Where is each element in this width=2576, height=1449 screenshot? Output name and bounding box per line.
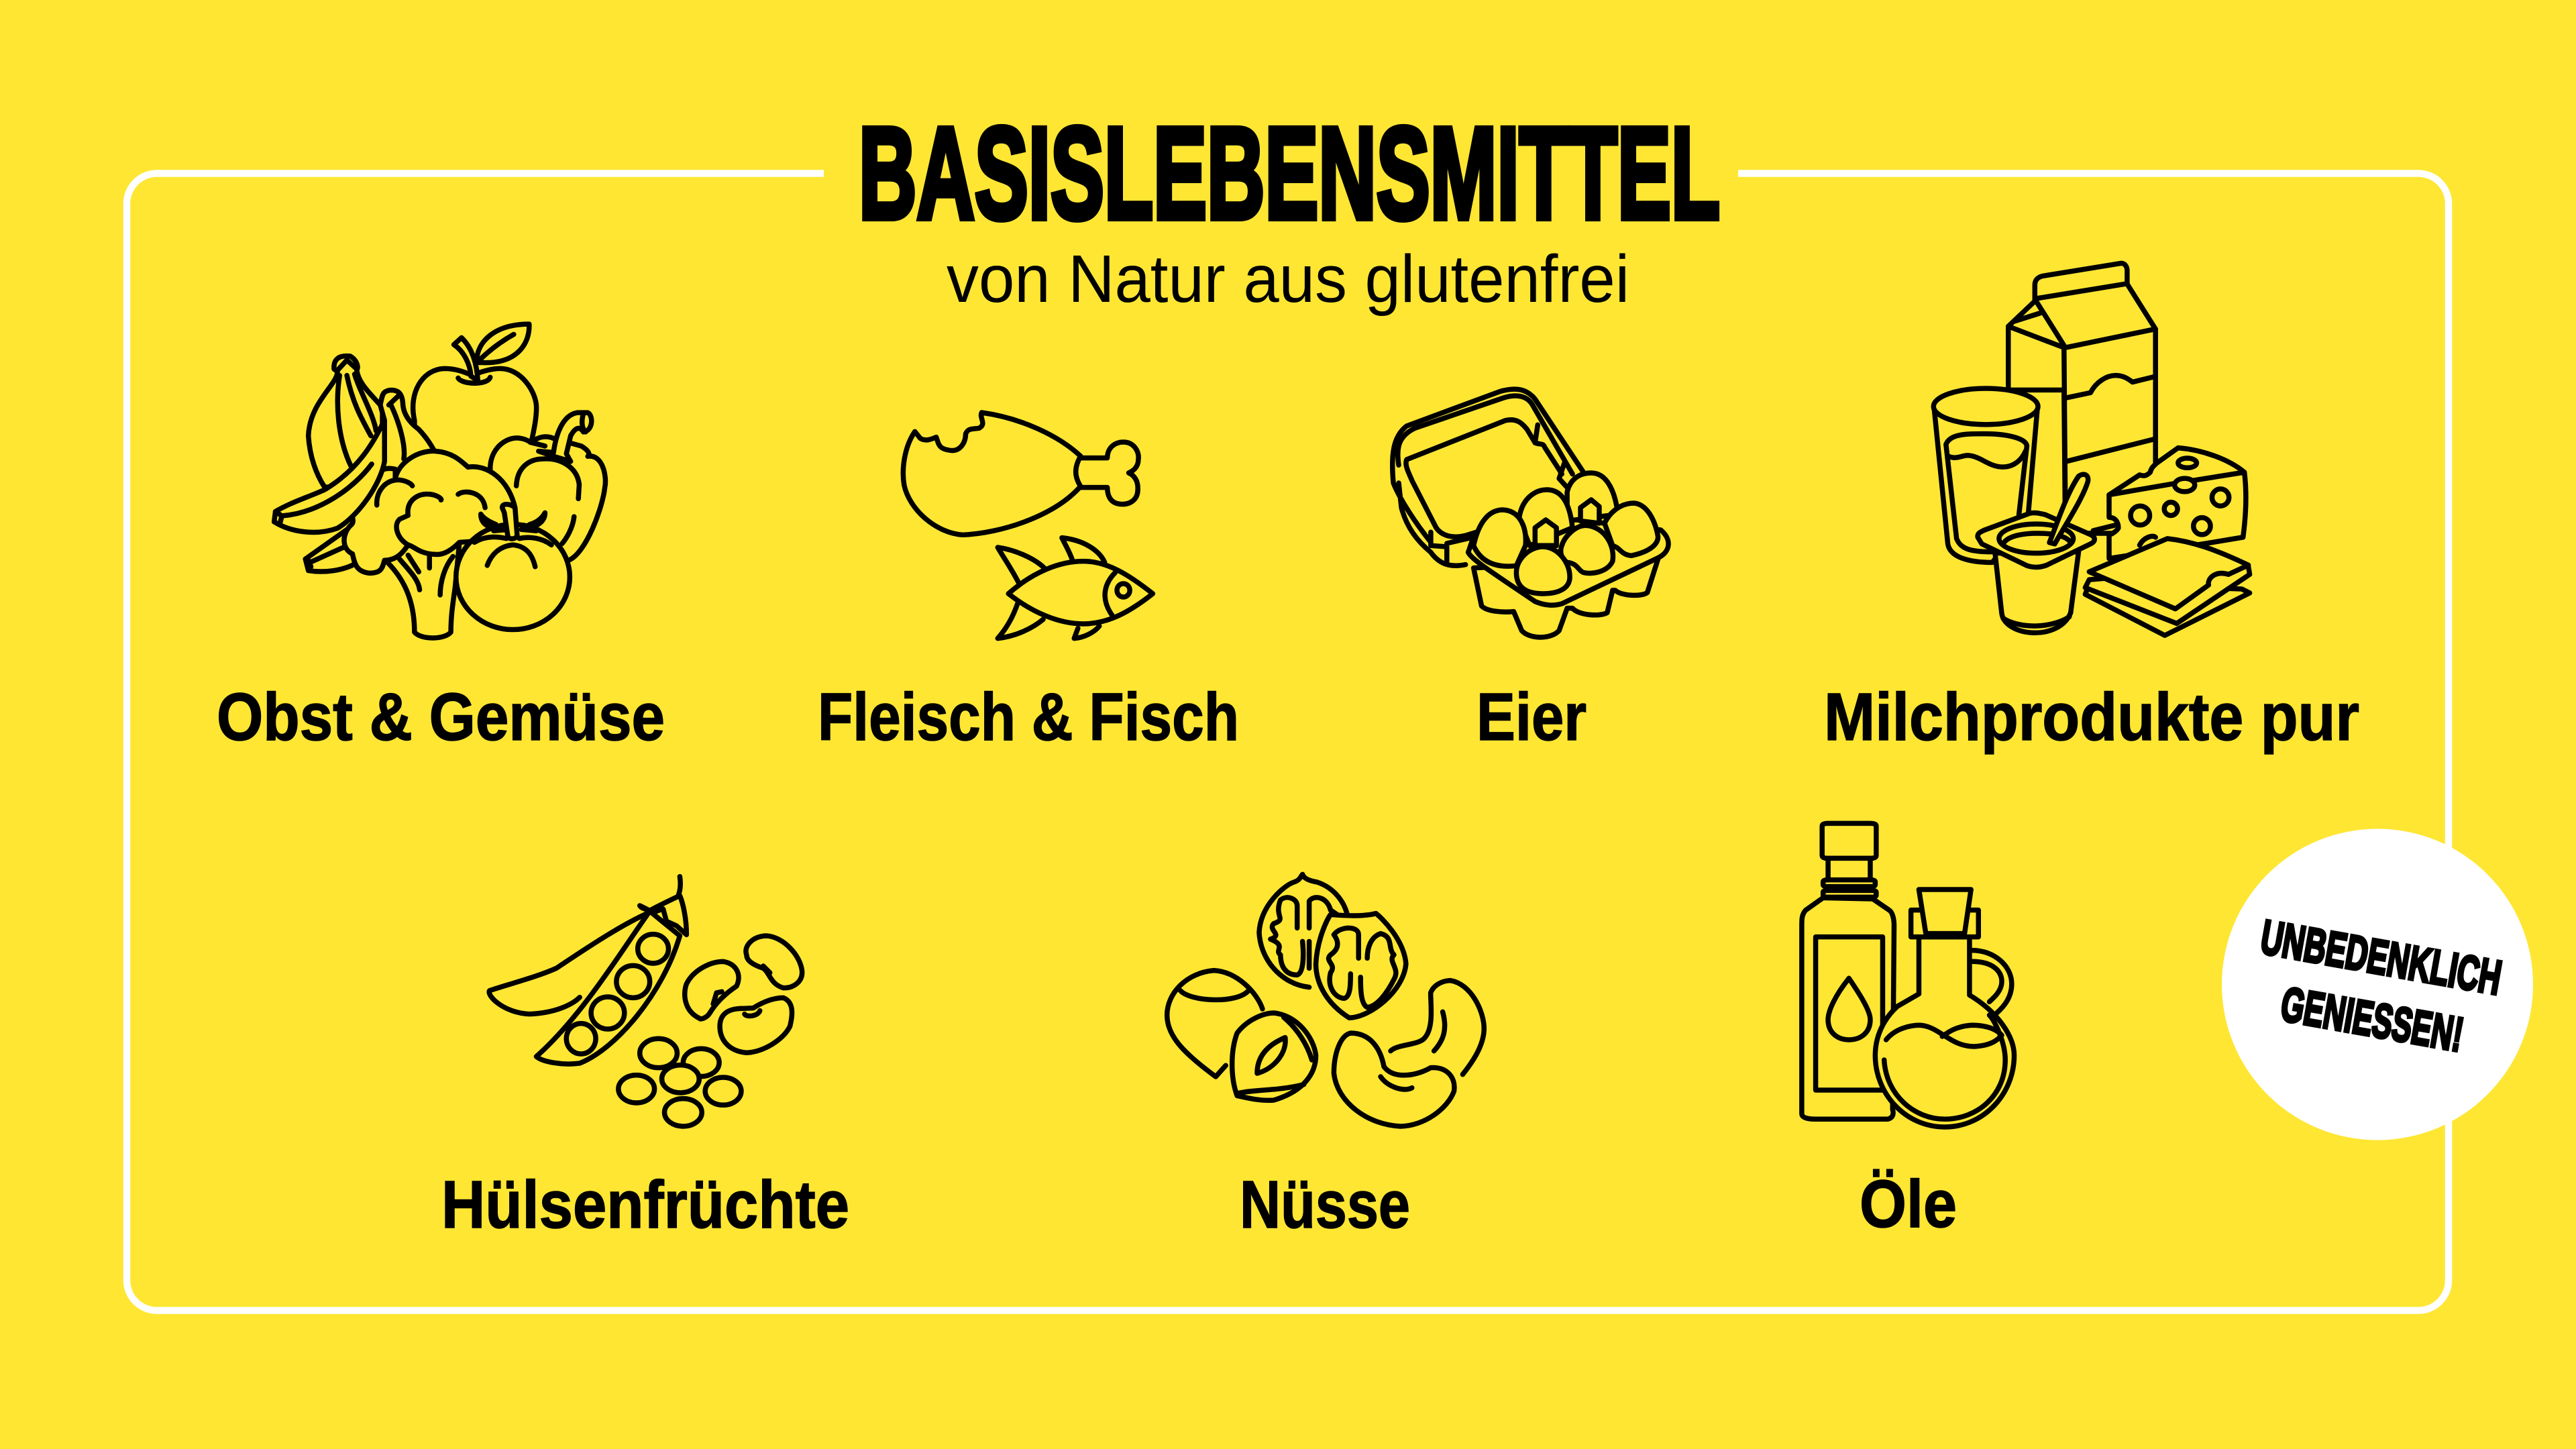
icon: milk, yogurt and cheese bbox=[1933, 263, 2250, 635]
icon: fruit and vegetables bbox=[274, 324, 605, 638]
panel: Milchprodukte pur bbox=[1824, 263, 2359, 755]
callout: badge bbox=[2222, 829, 2533, 1140]
title: BASISLEBENSMITTEL bbox=[859, 101, 1720, 247]
label: Nuesse: Nüsse bbox=[1240, 1167, 1410, 1242]
panel: Obst und Gemuese bbox=[217, 324, 665, 755]
panel: white rounded frame bbox=[127, 173, 2449, 1311]
icon: oil bottle and jug bbox=[1802, 823, 2015, 1127]
icon: egg carton bbox=[1393, 389, 1668, 637]
panel: Nuesse bbox=[1167, 874, 1484, 1242]
icon: pea pod and beans bbox=[489, 877, 802, 1126]
label: Fleisch und Fisch: Fleisch & Fisch bbox=[818, 680, 1239, 755]
subtitle: von Natur aus glutenfrei bbox=[947, 241, 1629, 317]
label: Milchprodukte pur: Milchprodukte pur bbox=[1824, 680, 2359, 755]
panel: Fleisch und Fisch bbox=[818, 413, 1239, 755]
icon: chicken leg and fish bbox=[903, 413, 1152, 639]
panel: Eier bbox=[1393, 389, 1668, 755]
panel: Huelsenfruechte bbox=[441, 877, 849, 1242]
badge circle bbox=[2222, 829, 2533, 1140]
label: Obst und Gemuese: Obst & Gemüse bbox=[217, 680, 665, 755]
badge text line 2: GENIESSEN! bbox=[2277, 977, 2467, 1062]
label: Oele: Öle bbox=[1860, 1167, 1957, 1242]
panel: Oele bbox=[1802, 823, 2015, 1242]
label: Eier: Eier bbox=[1477, 680, 1587, 755]
label: Huelsenfruechte: Hülsenfrüchte bbox=[441, 1167, 849, 1242]
icon: nuts bbox=[1167, 874, 1484, 1126]
